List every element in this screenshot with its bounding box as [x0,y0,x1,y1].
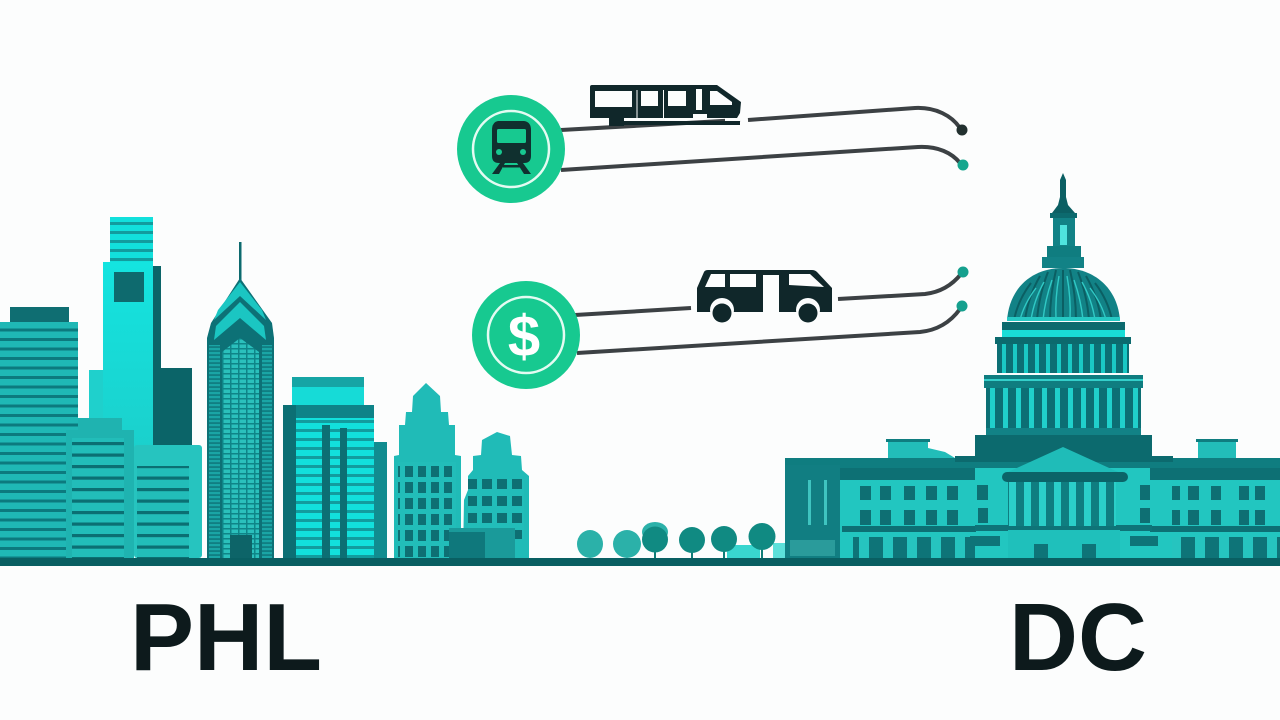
lantern and statue [1042,173,1084,268]
icon: train [590,85,741,126]
route end dot: bus upper [958,266,968,278]
Philadelphia skyline [0,217,529,558]
route end dot: rail upper [956,124,968,136]
tree 3 [642,526,668,559]
upper colonnade [995,322,1131,373]
building: stepped tower [394,383,461,558]
building: wide mid-rise [283,377,387,558]
icon: train badge [457,95,565,203]
dollar sign: $ [508,304,540,369]
route line: bus lower [577,309,960,353]
dome [1007,268,1120,321]
building: front block left [66,418,134,558]
icon: bus [697,270,832,322]
building: pointed spire tower [207,242,274,558]
building: front block right [134,445,202,558]
icon: dollar badge [472,281,580,389]
building: tall tower with dark window [89,217,192,450]
building: stepped low tower [449,432,529,558]
tree 1 [577,530,603,558]
building: left tower [0,307,78,558]
route line: rail upper [561,108,960,130]
wings [785,439,1280,558]
dome base tiers [955,428,1173,472]
route end dot: rail lower [958,160,968,170]
tree 2 [613,530,641,558]
label: PHL: PHL [130,584,322,691]
tree 4 [679,527,705,559]
central portico [970,472,1158,558]
windows [860,485,1265,525]
tree 6 [748,523,776,559]
ground line [0,558,1280,566]
route end dot: bus lower [956,300,968,312]
lower colonnade [984,375,1143,428]
tree 5 [711,526,737,559]
route line: rail lower [561,147,960,170]
label: DC: DC [1009,584,1147,691]
route line: bus upper [575,274,961,315]
US Capitol building [785,173,1280,558]
trees [577,522,787,559]
icon: front of train [492,121,531,174]
